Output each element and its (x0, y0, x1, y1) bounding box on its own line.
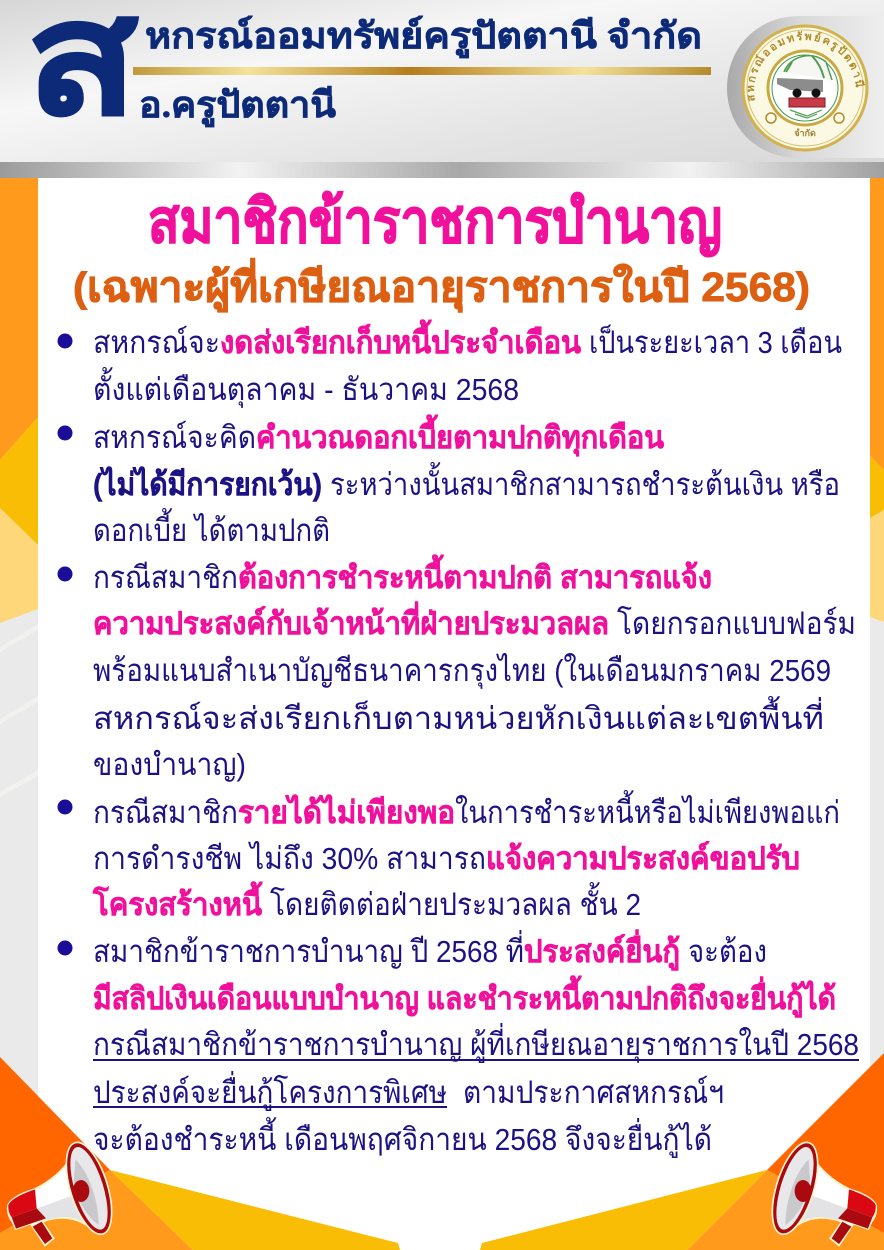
bullet item 3: ต้องการชำระหนี้ตามปกติ สามารถแจ้ง (238, 554, 712, 595)
subtitle: (เฉพาะผู้ที่เกษียณอายุราชการในปี 2568) (73, 258, 810, 313)
bullet item 1: ตั้งแต่เดือนตุลาคม - ธันวาคม 2568 (93, 367, 519, 409)
bullet item 4: รายได้ไม่เพียงพอ (238, 794, 455, 830)
bullet item 1 (58, 319, 842, 409)
bullet item 2: สหกรณ์จะคิด (93, 420, 256, 455)
bullet item 5: จะต้องชำระหนี้ เดือนพฤศจิกายน 2568 จึงจะยื่นกู้ได้ (93, 1117, 712, 1158)
bullet item 2: คำนวณดอกเบี้ยตามปกติทุกเดือน (256, 414, 664, 457)
bullet item 3 (58, 554, 856, 782)
bullet item 5: ประสงค์ยื่นกู้ (524, 929, 680, 971)
bullet item 5: ตามประกาศสหกรณ์ฯ (463, 1075, 724, 1110)
bullet item 3: ของบำนาญ) (93, 747, 246, 782)
header band (0, 0, 884, 162)
organisation name line 1: หกรณ์ออมทรัพย์ครูปัตตานี จำกัด (145, 15, 702, 59)
bullet item 4: ในการชำระหนี้หรือไม่เพียงพอแก่ (455, 790, 840, 830)
bullet item 2 (58, 414, 840, 548)
bullet item 1: งดส่งเรียกเก็บหนี้ประจำเดือน (220, 319, 581, 360)
bullet item 2: (ไม่ได้มีการยกเว้น) (93, 466, 322, 502)
bullet item 3: สหกรณ์จะส่งเรียกเก็บตามหน่วยหักเงินแต่ละเขตพื้นที่ (93, 696, 824, 736)
organisation name line 2: อ.ครูปัตตานี (139, 85, 336, 128)
logo backing shape (727, 16, 884, 158)
bullet item 3: กรณีสมาชิก (93, 560, 238, 595)
title: สมาชิกข้าราชการบำนาญ (148, 188, 722, 257)
bullet item 4: โดยติดต่อฝ่ายประมวลผล ชั้น 2 (270, 882, 641, 922)
bullet item 1: เป็นระยะเวลา 3 เดือน (589, 324, 842, 360)
right side decorative strip (870, 178, 884, 622)
gold divider bar (133, 67, 711, 75)
bullet item 4: แจ้งความประสงค์ขอปรับ (486, 841, 800, 876)
icon: left megaphone (8, 1137, 121, 1245)
bullet item 5: สมาชิกข้าราชการบำนาญ ปี 2568 ที่ (93, 930, 524, 969)
bullet item 3: ความประสงค์กับเจ้าหน้าที่ฝ่ายประมวลผล (93, 601, 609, 641)
bullet item 4: โครงสร้างหนี้ (92, 881, 263, 922)
bullet item 5: มีสลิปเงินเดือนแบบบำนาญ และชำระหนี้ตามปกติถึงจะยื่นกู้ได้ (93, 975, 836, 1018)
bullet item 3: โดยกรอกแบบฟอร์ม (617, 606, 856, 641)
metallic stripe (0, 162, 884, 178)
bullet item 5: ประสงค์จะยื่นกู้โครงการพิเศษ (93, 1071, 447, 1111)
bottom corner colour shapes (0, 1053, 884, 1250)
icon: right megaphone (763, 1137, 876, 1245)
bullet item 1: สหกรณ์จะ (93, 325, 220, 360)
bullet item 5 (58, 929, 859, 1158)
icon: cooperative emblem: สหกรณ์ออมทรัพย์ครูปัตตานี (748, 31, 866, 102)
bullet item 4 (58, 790, 840, 922)
left side decorative strip (0, 178, 38, 797)
icon: cooperative emblem (742, 24, 868, 152)
bullet item 4: กรณีสมาชิก (93, 795, 238, 830)
bullet item 4: การดำรงชีพ ไม่ถึง 30% สามารถ (93, 841, 486, 876)
bullet item 2: ดอกเบี้ย ได้ตามปกติ (93, 508, 330, 548)
icon: cooperative emblem: จำกัด (794, 128, 816, 138)
bullet item 5: จะต้อง (688, 934, 767, 969)
